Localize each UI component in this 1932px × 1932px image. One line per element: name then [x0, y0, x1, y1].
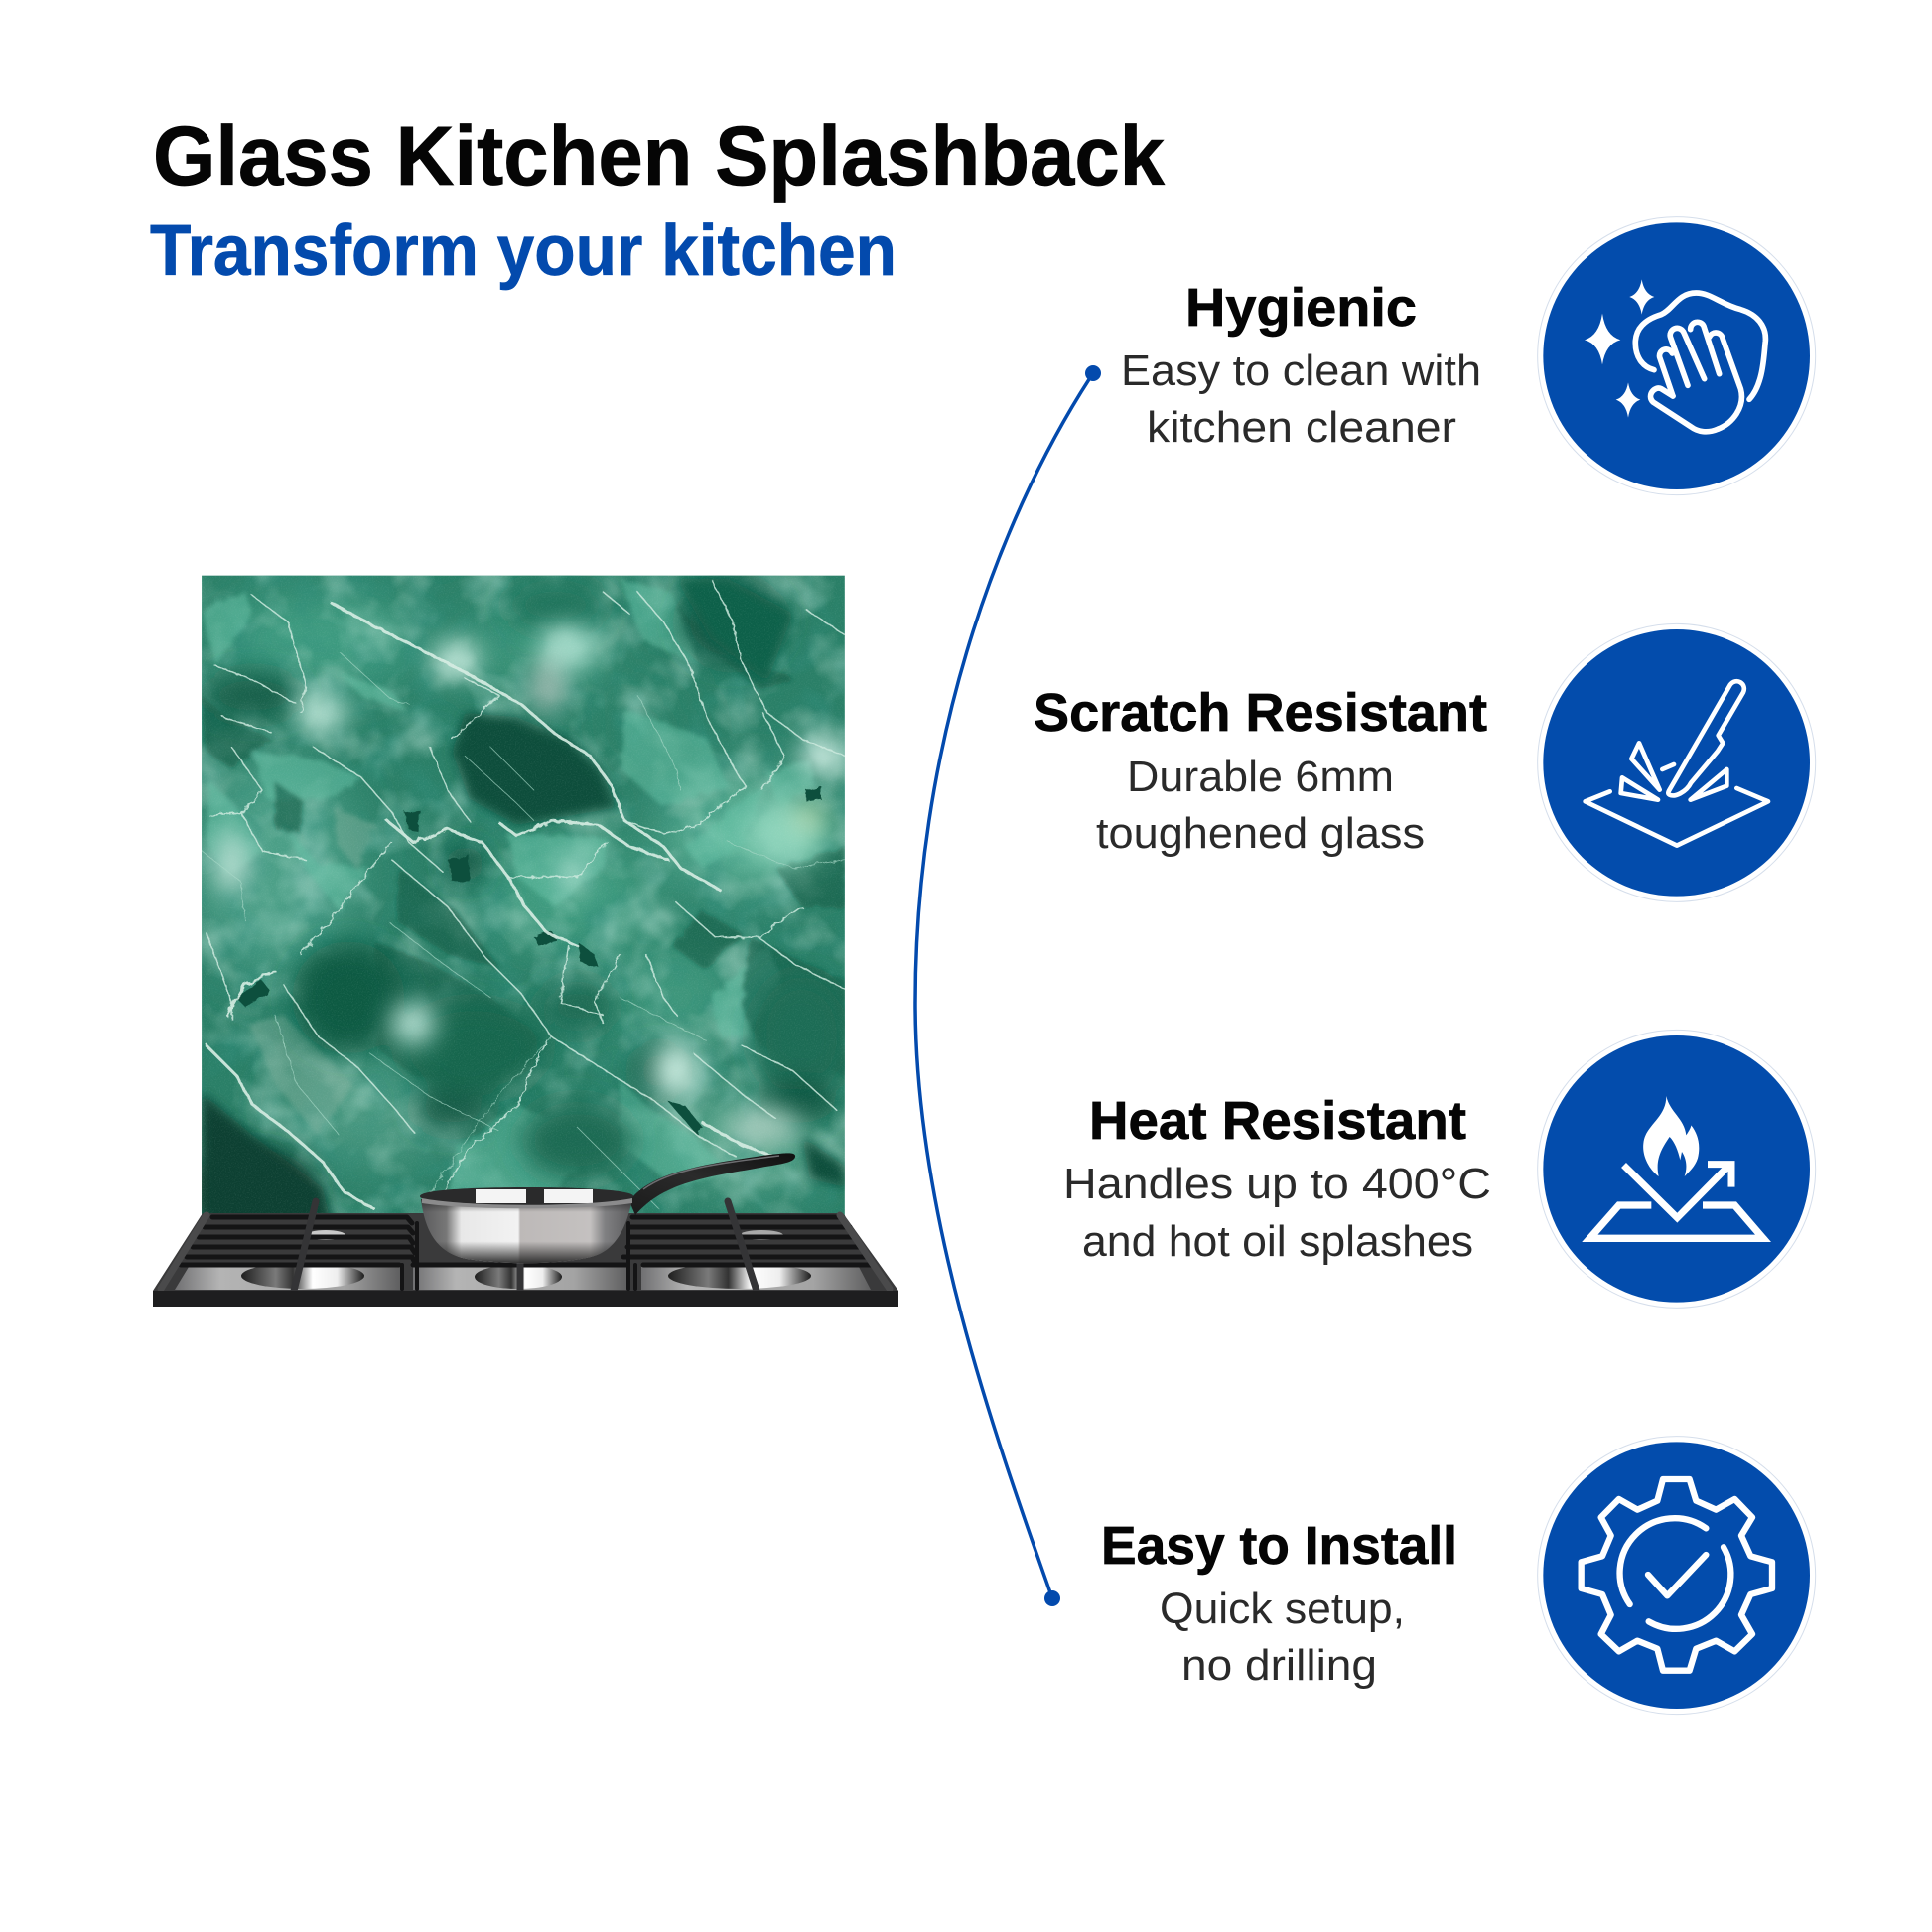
feature text: Heat Resistant: Heat Resistant [1089, 1091, 1466, 1151]
feature text: Scratch Resistant: Durable 6mm [1127, 753, 1394, 801]
hob burners [241, 1230, 811, 1289]
feature text: Heat Resistant: and hot oil splashes [1082, 1217, 1473, 1266]
feature text: Hygienic: kitchen cleaner [1147, 403, 1456, 452]
feature text: Hygienic [1121, 278, 1481, 452]
top dot [1085, 365, 1101, 381]
marble facets [202, 579, 845, 1205]
pan handle [629, 1153, 795, 1215]
curved connector line with end dots [915, 365, 1101, 1606]
title: Glass Kitchen Splashback [153, 109, 1165, 203]
illustration: gas hob with grates and burners [153, 1201, 898, 1307]
feature text: Heat Resistant: Handles up to 400°C [1063, 1160, 1491, 1208]
subtitle: Transform your kitchen [150, 211, 897, 291]
feature text: Easy to Install [1101, 1516, 1457, 1690]
pan rim [420, 1187, 633, 1206]
panel: green marble glass splashback [193, 576, 849, 1226]
hob trays [175, 1267, 871, 1290]
pan body [421, 1199, 632, 1263]
icon: flame reflected off glass [1538, 1030, 1816, 1308]
bottom dot [1044, 1590, 1060, 1606]
icon: knife scratching glass [1538, 623, 1816, 901]
icon: gear with check mark [1538, 1437, 1816, 1715]
feature text: Scratch Resistant: Scratch Resistant [1034, 683, 1487, 743]
feature text: Scratch Resistant [1034, 683, 1487, 858]
dark vein pockets [236, 786, 821, 1136]
marble veins [202, 579, 845, 1209]
feature text: Hygienic: Hygienic [1185, 278, 1417, 338]
feature text: Easy to Install: no drilling [1181, 1641, 1377, 1690]
illustration: stainless steel frying pan [420, 1153, 795, 1263]
icon: hand wiping with sparkles [1538, 217, 1816, 495]
hob grate bars [161, 1201, 890, 1291]
feature text: Heat Resistant [1063, 1091, 1491, 1266]
dark pocket [202, 1092, 331, 1223]
feature text: Scratch Resistant: toughened glass [1096, 809, 1425, 858]
feature text: Hygienic: Easy to clean with [1121, 346, 1481, 395]
feature text: Easy to Install: Easy to Install [1101, 1516, 1457, 1576]
feature text: Easy to Install: Quick setup, [1160, 1585, 1405, 1633]
